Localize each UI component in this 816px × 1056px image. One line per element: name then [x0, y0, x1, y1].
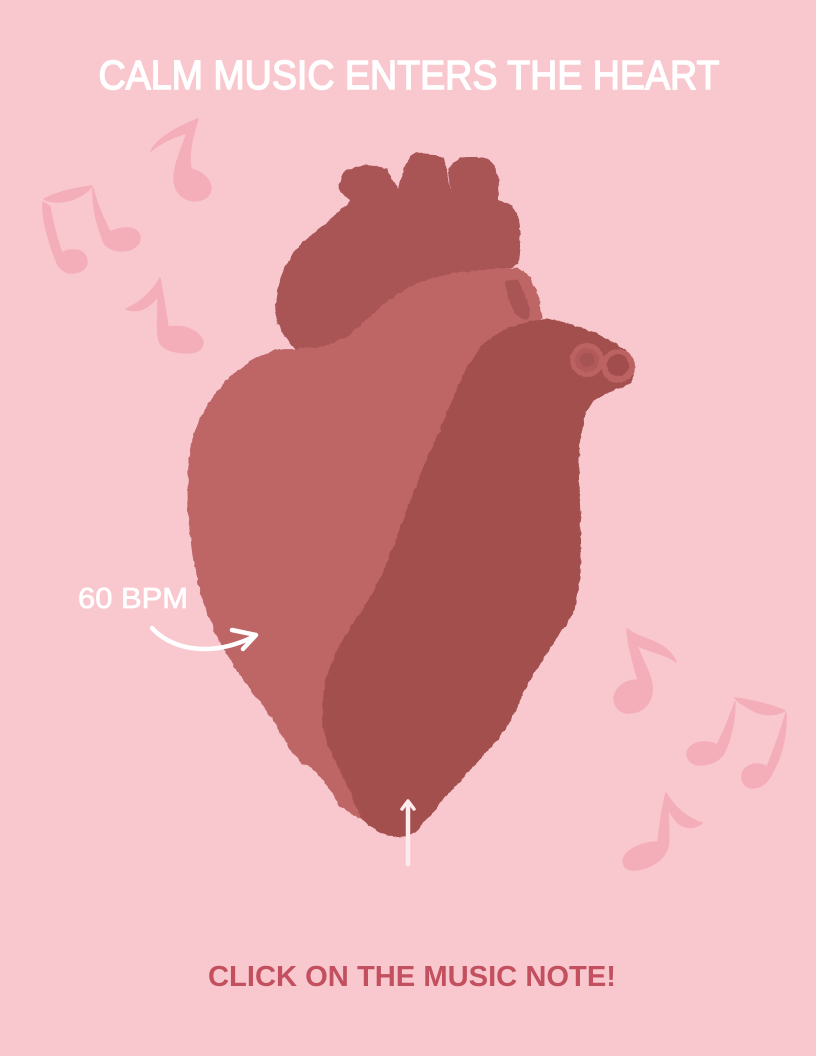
icon: double note — [43, 186, 140, 273]
icon: single note lower — [623, 793, 702, 870]
valve: aortic detail — [505, 280, 635, 383]
icon: single note bottom — [126, 278, 203, 353]
arrow: upward at heart tip — [402, 801, 414, 864]
icon: single note upper — [614, 629, 676, 713]
label: 60 BPM: 60 BPM — [78, 583, 188, 615]
icon: music notes bottom right — [614, 629, 786, 870]
arrow: curved to heart — [152, 628, 256, 649]
icon: single note top — [151, 119, 211, 201]
call to action: CLICK ON THE MUSIC NOTE! — [208, 961, 616, 993]
left ventricle, darker body — [323, 320, 634, 837]
right ventricle, lighter body — [188, 268, 542, 819]
icon: double note — [687, 698, 786, 788]
icon: music notes top left — [43, 119, 211, 353]
title: CALM MUSIC ENTERS THE HEART — [98, 52, 720, 98]
heart illustration — [188, 153, 635, 837]
atria and great vessels — [275, 153, 520, 352]
